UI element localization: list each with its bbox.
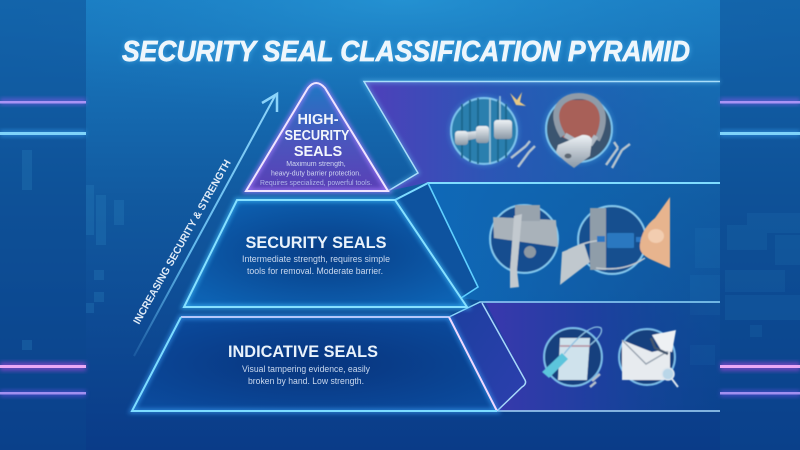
tier: indicative seals — [132, 317, 497, 411]
side neon lines: left — [0, 98, 86, 397]
arrow: increasing security and strength — [134, 94, 277, 356]
icon: strap seal — [490, 205, 558, 288]
icon: torn envelope with magnifier — [619, 329, 678, 387]
description — [242, 364, 370, 386]
arrow label: INCREASING SECURITY & STRENGTH — [131, 158, 234, 326]
heading: SECURITY SEALS — [246, 233, 386, 252]
side neon lines: right — [720, 98, 800, 397]
description — [260, 161, 372, 187]
description: tools for removal. Moderate barrier. — [247, 266, 383, 276]
description: Requires specialized, powerful tools. — [260, 180, 372, 187]
title: SECURITY SEAL CLASSIFICATION PYRAMID — [122, 36, 690, 68]
description: Visual tampering evidence, easily — [242, 364, 370, 374]
icon: cable seal with hand — [560, 197, 670, 285]
pliers — [606, 142, 630, 168]
tier: high-security seals — [246, 83, 388, 191]
heading: HIGH- — [297, 112, 339, 128]
cutters — [511, 141, 535, 167]
heading — [284, 112, 350, 160]
description: broken by hand. Low strength. — [248, 376, 364, 386]
icon: tamper-evident bag — [542, 327, 602, 387]
description: Intermediate strength, requires simple — [242, 254, 390, 264]
panel: security side band — [395, 183, 720, 307]
description — [242, 254, 390, 276]
heading: SECURITY — [284, 128, 350, 144]
icon: cable lock seal — [543, 93, 630, 168]
panel: indicative side band — [449, 301, 720, 411]
broken chain — [590, 374, 600, 387]
description: heavy-duty barrier protection. — [271, 170, 361, 178]
title: SECURITY SEAL CLASSIFICATION PYRAMID — [122, 36, 690, 68]
icon: bolt seal — [448, 92, 535, 167]
heading: SEALS — [294, 144, 342, 160]
heading: INDICATIVE SEALS — [228, 342, 378, 361]
spark — [510, 92, 526, 106]
panel: high-security side band — [364, 82, 720, 191]
description: Maximum strength, — [286, 161, 346, 168]
magnifier — [662, 368, 674, 380]
tier: security seals — [184, 200, 467, 307]
